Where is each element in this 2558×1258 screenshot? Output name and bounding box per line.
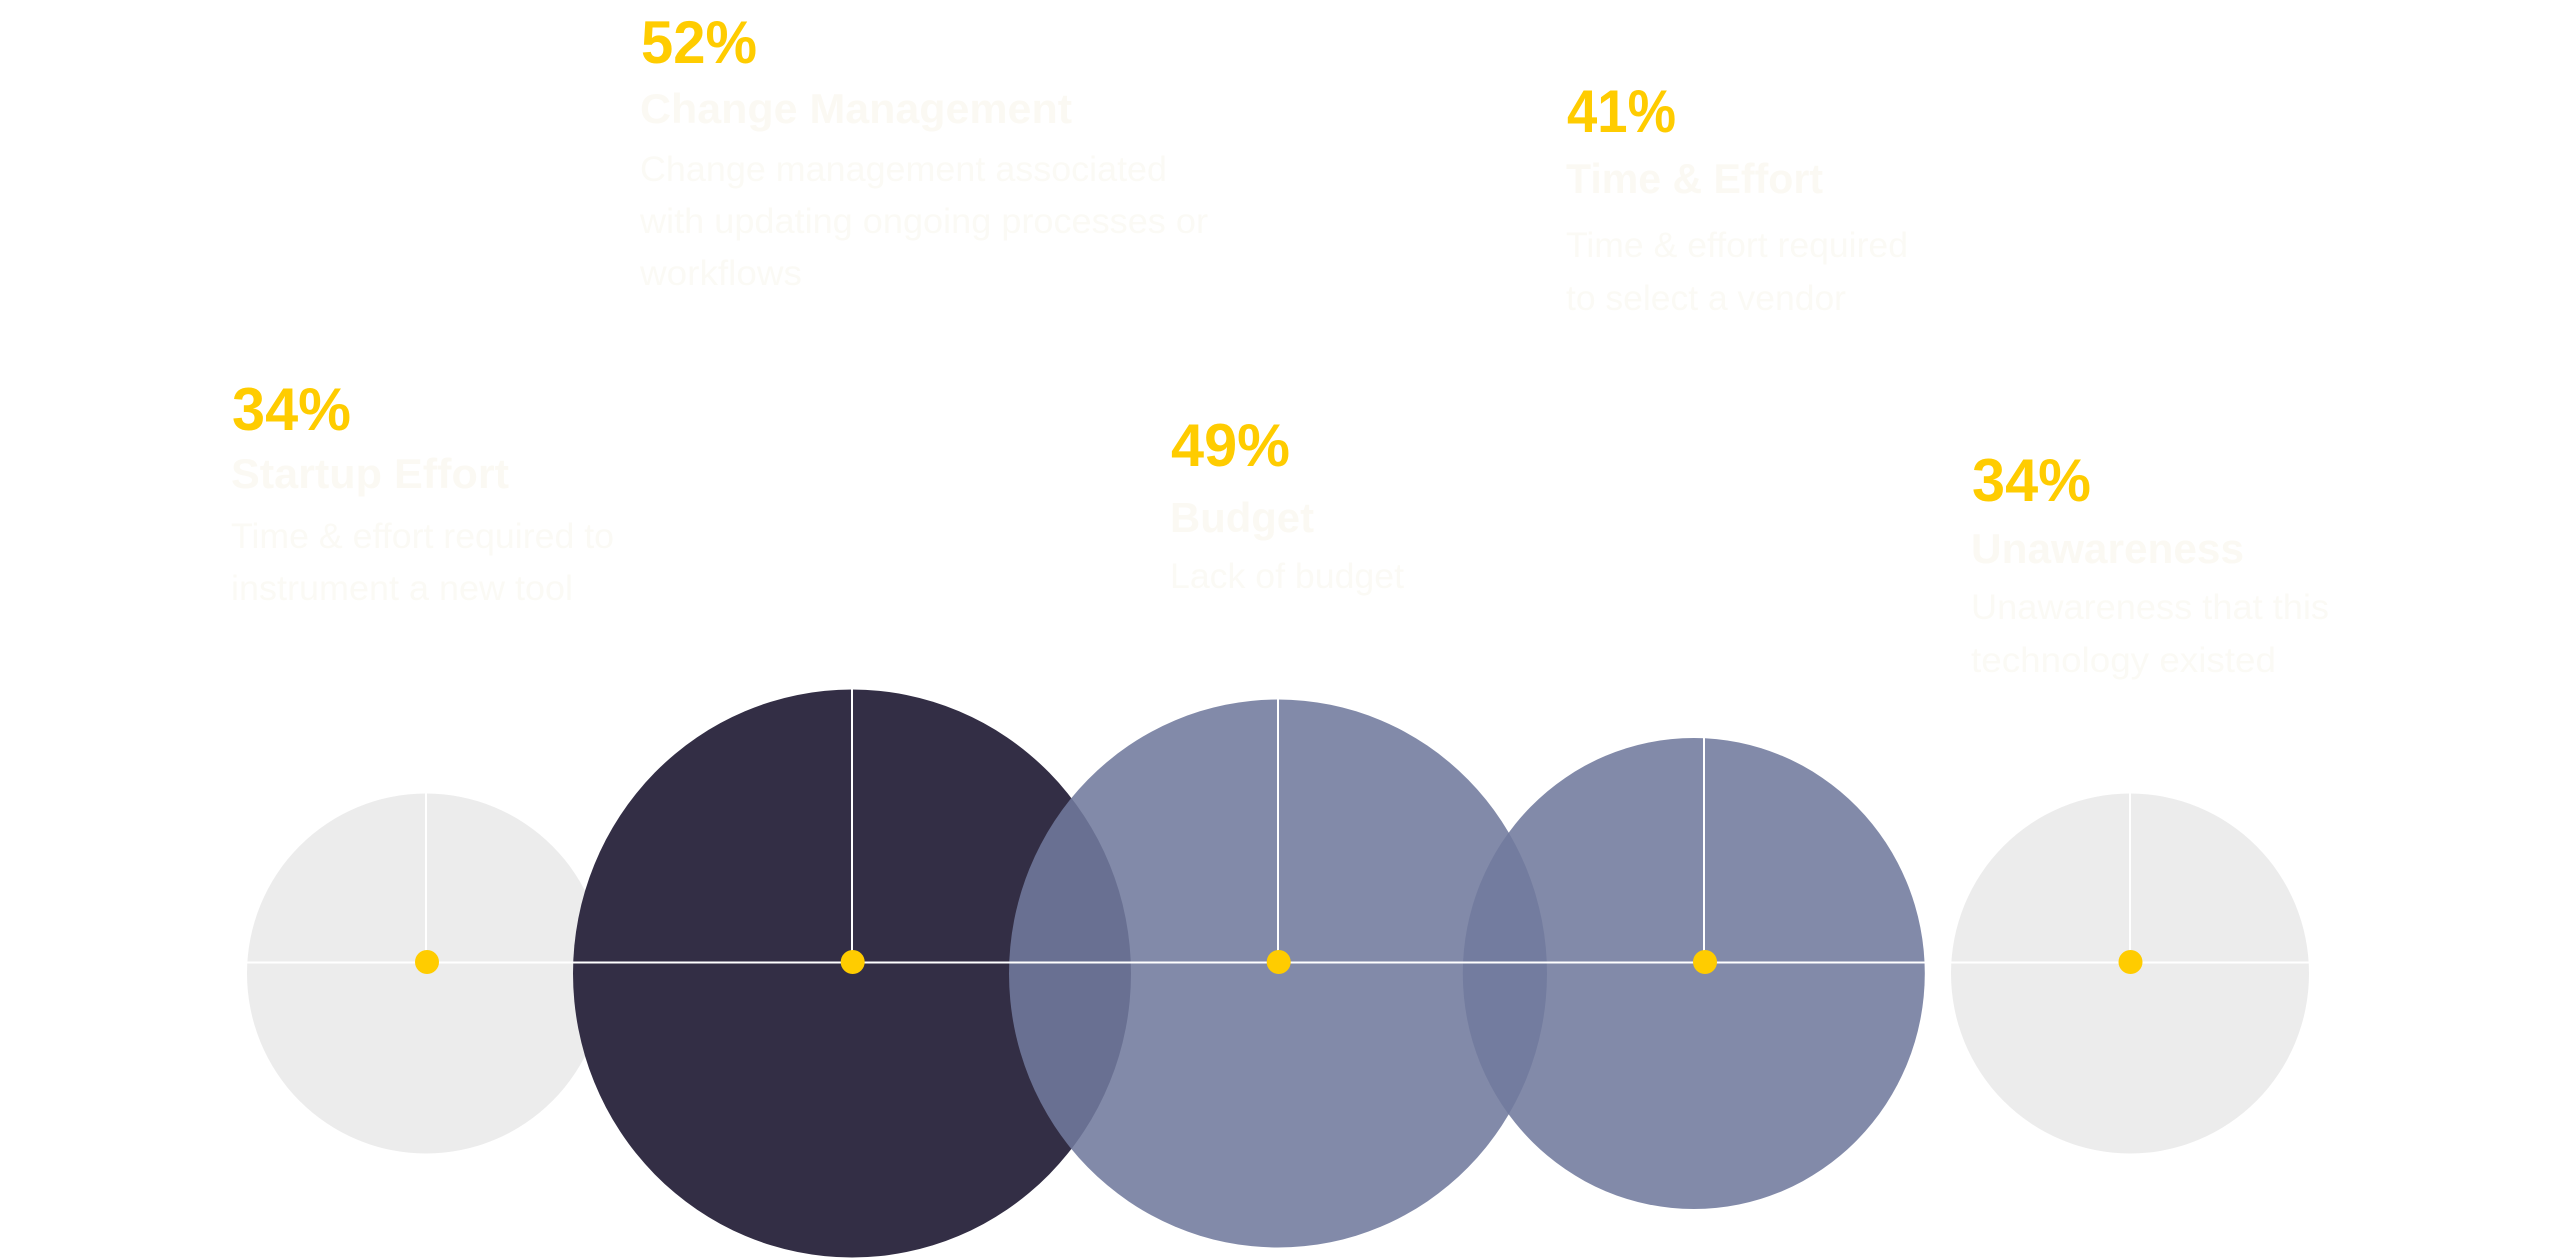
text block: 49% Budget: Lack of budget (1170, 557, 1404, 596)
text block: 52% Change Management (639, 9, 1208, 293)
text block: 34% Unawareness (1971, 447, 2329, 680)
text block: 41% Time & Effort: Time & Effort (1566, 155, 1823, 202)
text block: 41% Time & Effort: 41% (1567, 78, 1676, 145)
bubble: Startup Effort 34% (247, 794, 605, 1154)
marker stems (425, 689, 2131, 962)
bubble: Time & Effort 41% (1463, 738, 1925, 1209)
text block: 52% Change Management: workflows (639, 254, 802, 293)
text block: 52% Change Management: Change management associated (640, 150, 1167, 189)
text block: 34% Unawareness: Unawareness that this (1971, 588, 2329, 627)
text block: 52% Change Management: with updating ongoing processes or (639, 202, 1208, 241)
marker dots (415, 950, 2142, 974)
text block: 41% Time & Effort: to select a vendor (1566, 279, 1846, 318)
text block: 34% Startup Effort: 34% (232, 376, 351, 443)
text block: 34% Startup Effort (231, 376, 614, 608)
axis line (246, 962, 2310, 964)
text block: 52% Change Management: Change Management (640, 85, 1072, 132)
text block: 49% Budget: 49% (1171, 412, 1290, 479)
bubble: Change Management 52% (573, 690, 1131, 1258)
text block: 34% Unawareness: 34% (1972, 447, 2091, 514)
text block: 34% Startup Effort: Startup Effort (231, 450, 509, 497)
text block: 49% Budget: Budget (1170, 494, 1314, 541)
text block: 52% Change Management: 52% (641, 9, 757, 76)
text block: 49% Budget (1170, 412, 1404, 596)
text block: 34% Unawareness: technology existed (1971, 641, 2276, 680)
text block: 34% Unawareness: Unawareness (1971, 525, 2244, 572)
text block: 34% Startup Effort: instrument a new tool (231, 569, 573, 608)
text block: 41% Time & Effort: Time & effort required (1566, 226, 1908, 265)
bubble: Budget 49% (1009, 700, 1547, 1248)
text block: 41% Time & Effort (1566, 78, 1908, 318)
text block: 34% Startup Effort: Time & effort required to (231, 517, 614, 556)
bubble: Unawareness 34% (1951, 794, 2309, 1154)
